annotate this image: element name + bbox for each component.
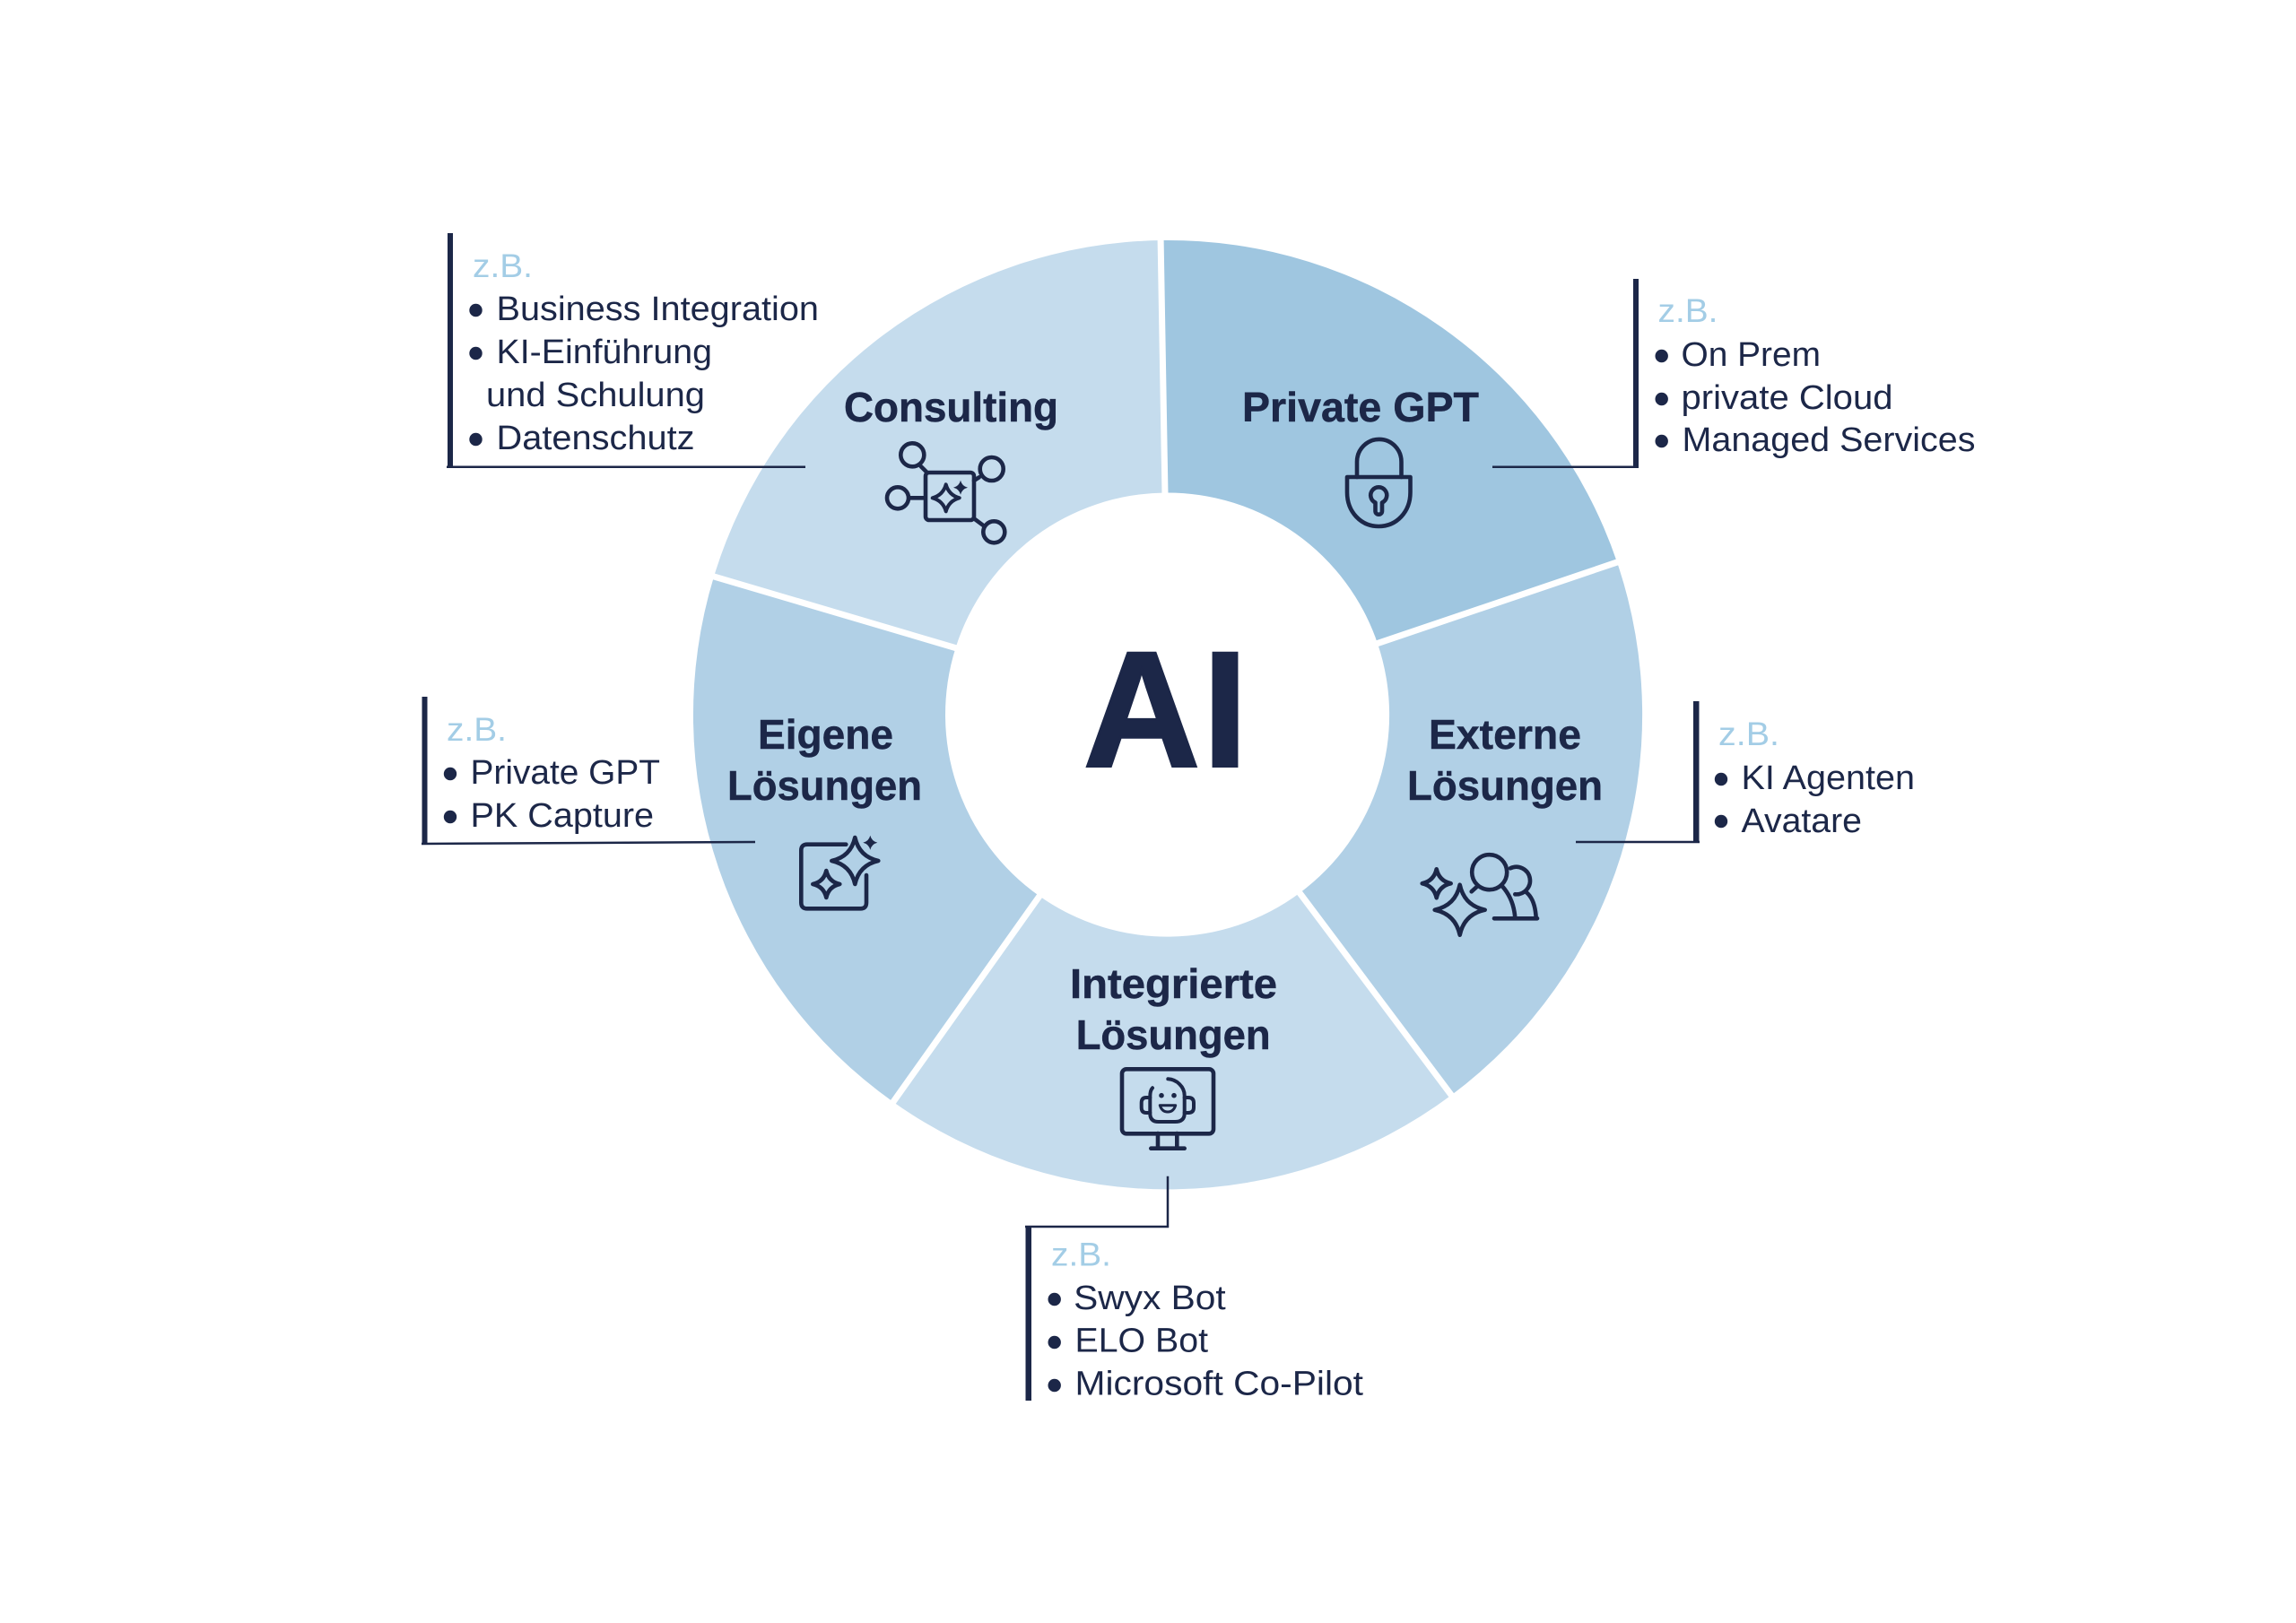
list: Private GPT examples: On Prem bbox=[1681, 336, 1821, 374]
list: Consulting examples: und Schulung bbox=[486, 377, 705, 414]
heading: Private GPT: Private GPT bbox=[1242, 384, 1479, 430]
list: Consulting examples: Datenschutz bbox=[497, 420, 694, 457]
list: Consulting examples bbox=[469, 291, 819, 457]
center label: AI: AI bbox=[1083, 619, 1248, 802]
donut chart bbox=[693, 235, 1642, 1189]
list: Externe Lösungen examples: KI Agenten bbox=[1742, 759, 1915, 797]
label: z.B.: z.B. bbox=[1718, 716, 1779, 752]
segment: Externe Lösungen bbox=[1300, 562, 1642, 1096]
heading: Externe Lösungen bbox=[1407, 711, 1603, 809]
callout: Externe Lösungen bbox=[1576, 701, 1915, 843]
list: Private GPT examples: private Cloud bbox=[1681, 379, 1892, 417]
label: z.B.: z.B. bbox=[1051, 1237, 1111, 1273]
label: z.B.: z.B. bbox=[473, 247, 533, 284]
list: Integrierte Lösungen examples: Swyx Bot bbox=[1074, 1280, 1226, 1317]
icon: monitor with robot bbox=[1122, 1069, 1213, 1149]
icon: network with sparkles bbox=[887, 443, 1004, 542]
icon: padlock bbox=[1347, 439, 1410, 526]
heading: Integrierte Lösungen: Lösungen bbox=[1076, 1011, 1271, 1058]
heading: Eigene Lösungen: Eigene bbox=[758, 711, 893, 758]
callout: Private GPT bbox=[1492, 279, 1975, 468]
list: Consulting examples: Business Integration bbox=[497, 291, 819, 328]
heading: Integrierte Lösungen bbox=[1070, 960, 1277, 1058]
heading: Externe Lösungen: Lösungen bbox=[1407, 762, 1603, 809]
segment: Integrierte Lösungen bbox=[893, 893, 1451, 1189]
heading: Consulting: Consulting bbox=[844, 384, 1058, 430]
icon: frame with sparkles bbox=[801, 836, 878, 908]
list: Integrierte Lösungen examples: ELO Bot bbox=[1074, 1323, 1208, 1360]
segment: Consulting bbox=[714, 240, 1165, 647]
segment: Eigene Lösungen bbox=[693, 577, 1039, 1102]
heading: Eigene Lösungen bbox=[727, 711, 922, 809]
heading: Integrierte Lösungen: Integrierte bbox=[1070, 960, 1277, 1007]
callout: Integrierte Lösungen bbox=[1025, 1176, 1363, 1403]
list: Externe Lösungen examples: Avatare bbox=[1742, 803, 1862, 840]
icon: people with sparkles bbox=[1422, 855, 1537, 935]
list: Eigene Lösungen examples: Private GPT bbox=[470, 754, 660, 792]
list: Externe Lösungen examples bbox=[1715, 759, 1915, 840]
list: Integrierte Lösungen examples: Microsoft Co-Pilot bbox=[1074, 1366, 1363, 1403]
callout: Eigene Lösungen bbox=[422, 697, 755, 845]
heading: Externe Lösungen: Externe bbox=[1429, 711, 1581, 758]
list: Eigene Lösungen examples: PK Capture bbox=[470, 797, 654, 835]
label: z.B.: z.B. bbox=[447, 711, 507, 748]
segment: Private GPT bbox=[1162, 240, 1617, 644]
callout: Consulting bbox=[447, 233, 819, 468]
label: z.B.: z.B. bbox=[1657, 292, 1718, 329]
list: Private GPT examples bbox=[1656, 336, 1975, 459]
list: Private GPT examples: Managed Services bbox=[1683, 421, 1975, 459]
heading: Eigene Lösungen: Lösungen bbox=[727, 762, 922, 809]
list: Consulting examples: KI-Einführung bbox=[497, 334, 712, 371]
list: Integrierte Lösungen examples bbox=[1048, 1280, 1363, 1403]
list: Eigene Lösungen examples bbox=[444, 754, 660, 835]
